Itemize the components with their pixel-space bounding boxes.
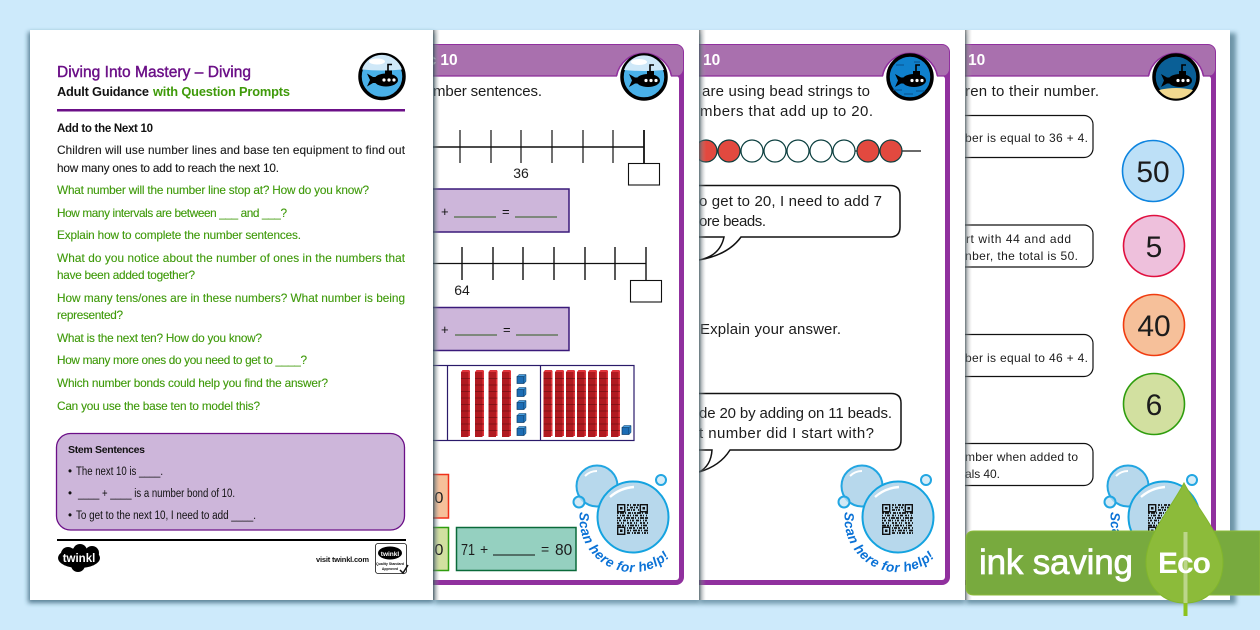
question prompts: Which number bonds could help you find the answer? [57, 376, 328, 390]
question prompts: What number will the number line stop at? How do you know? [57, 183, 369, 197]
number line 36: 36 [513, 165, 529, 181]
subtitle: Adult Guidance [57, 84, 149, 99]
number circle 50: 50 [1136, 156, 1170, 189]
number sentence box 1 [425, 189, 569, 232]
speech bubble 1 [690, 186, 900, 260]
speech bubble 2: t number did I start with? [699, 425, 874, 442]
scan bubbles with QR code [1104, 466, 1208, 572]
teal sum box [456, 528, 576, 570]
question prompts: Explain how to complete the number sentences. [57, 228, 301, 242]
instruction: are using bead strings to [702, 83, 870, 100]
subtitle [57, 84, 290, 99]
clue bubble 3 [950, 334, 1093, 376]
eco ink saving banner [966, 483, 1260, 616]
teal sum box: 71 [461, 542, 475, 559]
ink saving label: ink saving [979, 543, 1133, 582]
number circle 40 [1124, 294, 1184, 356]
stem sentences box: • [68, 466, 72, 478]
clue bubble 2: rt with 44 and add [966, 232, 1071, 246]
instruction: mber sentences. [433, 83, 542, 100]
question prompts: represented? [57, 308, 123, 322]
shadow from page 2 [965, 30, 972, 600]
question prompts: Can you use the base ten to model this? [57, 399, 260, 413]
question prompts: What do you notice about the number of ones in the numbers that [57, 251, 406, 265]
question text: Explain your answer. [700, 321, 841, 338]
stem sentences box: To get to the next 10, I need to add ____. [76, 510, 256, 522]
speech bubble 2: de 20 by adding on 11 beads. [699, 405, 892, 422]
number circle 40: 40 [1137, 310, 1171, 343]
stem sentences box: • [68, 510, 72, 522]
clue bubble 4: als 40. [965, 467, 1000, 481]
number circle 6: 6 [1146, 389, 1162, 422]
icon: submarine on seabed [1154, 55, 1198, 99]
scan bubbles with QR code [574, 466, 677, 572]
header label: c 10 [428, 52, 458, 69]
header label: t 10 [694, 52, 720, 69]
twinkl logo: twinkl [63, 553, 95, 565]
worksheet page 1: number lines [428, 30, 703, 607]
question prompts: How many tens/ones are in these numbers? What number is being [57, 291, 405, 305]
quality badge: Approved [382, 567, 398, 571]
quality badge [376, 544, 408, 574]
bead string [695, 140, 921, 162]
icon: submarine badge [360, 54, 404, 98]
icon: eco leaf [1146, 483, 1223, 616]
number line 64: 64 [454, 282, 470, 298]
green sum box [425, 528, 448, 570]
question prompts: How many intervals are between ___ and ___? [57, 206, 287, 220]
instruction: ren to their number. [965, 83, 1099, 100]
worksheet page 3: match the children [958, 30, 1239, 608]
number sentence box 2: = [503, 322, 511, 337]
icon: submarine at surface [622, 55, 666, 99]
number circle 5 [1124, 216, 1184, 276]
scan caption: Scan here for help! [579, 512, 668, 572]
stem sentences box: • [68, 488, 72, 500]
clue bubble 2: nber, the total is 50. [965, 249, 1078, 263]
section heading: Add to the Next 10 [57, 123, 153, 135]
instruction [700, 83, 873, 120]
scan caption: Scan here for help! [844, 512, 934, 572]
speech bubble 1: o get to 20, I need to add 7 [699, 193, 882, 210]
question prompts: How many more ones do you need to get to ____? [57, 353, 307, 367]
orange sum box [425, 474, 448, 518]
green sum box: 0 [435, 542, 444, 559]
number circle 5: 5 [1146, 231, 1162, 264]
stem sentences box [56, 434, 404, 530]
clue bubble 3: ber is equal to 46 + 4. [965, 351, 1088, 365]
number sentence box 1: = [502, 204, 510, 219]
base ten models [425, 366, 634, 440]
worksheet page 2: bead strings [694, 30, 968, 607]
question prompts: What is the next ten? How do you know? [57, 331, 262, 345]
teal sum box: 80 [555, 542, 573, 559]
scan caption: Scan here for help! [1110, 512, 1120, 530]
quality badge: Quality Standard [376, 562, 404, 566]
intro text: how many ones to add to reach the next 10. [57, 161, 279, 175]
number circle 50 [1122, 140, 1184, 202]
clue bubble 4 [950, 444, 1093, 486]
icon: submarine underwater [888, 55, 932, 99]
subtitle: with Question Prompts [152, 84, 290, 99]
teal sum box: = [541, 541, 549, 557]
orange sum box: 0 [435, 490, 444, 507]
twinkl logo [58, 544, 100, 572]
speech bubble 1: ore beads. [699, 213, 766, 230]
number line 36 [433, 130, 660, 185]
intro text [57, 143, 406, 175]
stem sentences box: The next 10 is ____. [76, 466, 163, 478]
speech bubble 2 [690, 394, 901, 472]
number sentence box 1: + [441, 204, 449, 219]
title: Diving Into Mastery – Diving [57, 64, 251, 81]
number sentence box 2 [425, 308, 569, 350]
clue bubble 4: mber when added to [965, 450, 1078, 464]
icon: eco leaf: Eco [1158, 547, 1211, 580]
clue bubble 1: ber is equal to 36 + 4. [965, 131, 1088, 145]
stem sentences box: Stem Sentences [68, 444, 145, 456]
panel: adult guidance page [28, 30, 434, 603]
question prompts: have been added together? [57, 268, 195, 282]
number sentence box 2: + [441, 322, 449, 337]
shadow from guidance page [433, 30, 440, 600]
scan bubbles with QR code [838, 466, 942, 572]
question prompts [57, 183, 406, 413]
number circle 6 [1124, 374, 1184, 434]
header label: t 10 [958, 52, 985, 69]
quality badge: twinkl [381, 551, 399, 558]
clue bubble 1 [950, 116, 1093, 158]
instruction: mbers that add up to 20. [700, 103, 873, 120]
website link: visit twinkl.com [316, 555, 369, 564]
shadow from page 1 [699, 30, 706, 600]
teal sum box: + [480, 541, 488, 557]
intro text: Children will use number lines and base ten equipment to find out [57, 143, 406, 157]
clue bubble 2 [950, 225, 1093, 267]
stem sentences box: ____ + ____ is a number bond of 10. [77, 488, 235, 500]
number line 64 [433, 247, 662, 302]
